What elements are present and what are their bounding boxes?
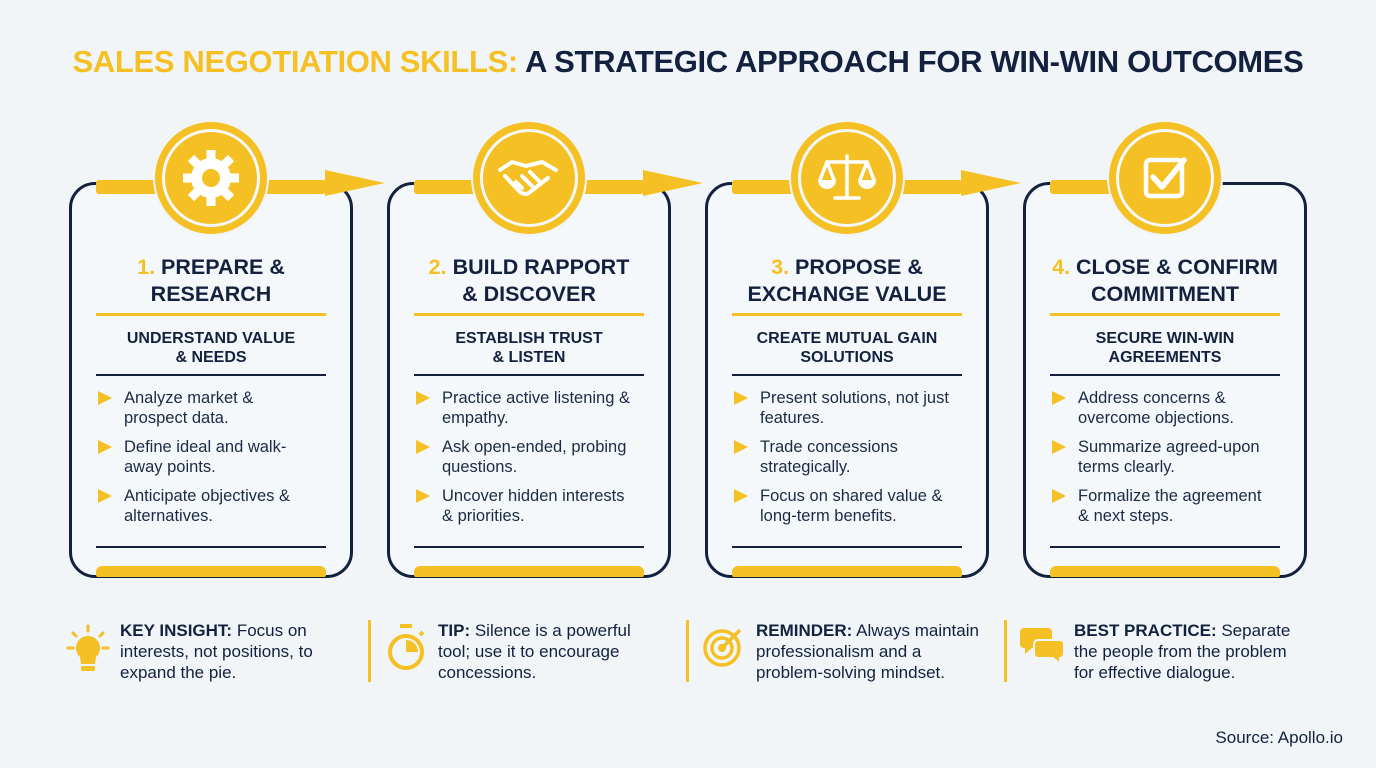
icon: checkbox bbox=[1107, 120, 1223, 236]
bullets 4: terms clearly. bbox=[1078, 458, 1175, 476]
bullets 1: Analyze market & bbox=[124, 389, 253, 407]
tip 4: best practice: for effective dialogue. bbox=[1074, 663, 1235, 682]
subheading 3 bbox=[757, 330, 937, 366]
heading 4 bbox=[1052, 255, 1278, 306]
source: Source: Apollo.io bbox=[1215, 728, 1343, 747]
bullets 2: Practice active listening & bbox=[442, 389, 630, 407]
subheading 2 bbox=[455, 330, 603, 366]
heading 2 bbox=[429, 255, 630, 306]
bullets 1: alternatives. bbox=[124, 507, 213, 525]
arrows bbox=[96, 170, 1150, 196]
tip 2: tip: concessions. bbox=[438, 663, 536, 682]
subheading 4 bbox=[1096, 330, 1234, 366]
bullets 3: long-term benefits. bbox=[760, 507, 897, 525]
card 4 bbox=[1023, 182, 1307, 578]
bullets 1: Define ideal and walk- bbox=[124, 438, 286, 456]
heading 1 bbox=[137, 255, 285, 306]
subheading 2: & LISTEN bbox=[493, 349, 565, 366]
heading 2: & DISCOVER bbox=[462, 282, 596, 306]
icon: lightbulb bbox=[66, 624, 110, 671]
tip 4: best practice: the people from the problem bbox=[1074, 642, 1287, 661]
tip 3: reminder: problem-solving mindset. bbox=[756, 663, 945, 682]
subheading 1: & NEEDS bbox=[175, 349, 247, 366]
icon: speech bubbles bbox=[1020, 628, 1063, 662]
subheading 3: CREATE MUTUAL GAIN bbox=[757, 330, 937, 347]
bullets 4: & next steps. bbox=[1078, 507, 1173, 525]
title: SALES NEGOTIATION SKILLS: A STRATEGIC APPROACH FOR WIN-WIN OUTCOMES bbox=[73, 44, 1303, 79]
bullets 2: questions. bbox=[442, 458, 517, 476]
bullets 3: Focus on shared value & bbox=[760, 487, 943, 505]
tip 1: key insight bbox=[66, 621, 313, 682]
bullets 2: Uncover hidden interests bbox=[442, 487, 625, 505]
bullets 3 bbox=[734, 389, 949, 525]
bullets 2 bbox=[416, 389, 630, 525]
bullets 3: features. bbox=[760, 409, 824, 427]
heading 2: 2. BUILD RAPPORT bbox=[429, 255, 629, 279]
bullets 1: Anticipate objectives & bbox=[124, 487, 290, 505]
heading 4: COMMITMENT bbox=[1091, 282, 1239, 306]
card 3 bbox=[705, 182, 989, 578]
tip 3: reminder bbox=[703, 621, 979, 682]
bullets 4: overcome objections. bbox=[1078, 409, 1234, 427]
tip 3: reminder: professionalism and a bbox=[756, 642, 921, 661]
icon: gear bbox=[153, 120, 269, 236]
subheading 4: SECURE WIN-WIN bbox=[1096, 330, 1234, 347]
card 2 bbox=[387, 182, 671, 578]
bullets 1: away points. bbox=[124, 458, 216, 476]
subheading 2: ESTABLISH TRUST bbox=[455, 330, 603, 347]
tip 4: best practice: BEST PRACTICE: Separate bbox=[1074, 621, 1290, 640]
bullets 3: Present solutions, not just bbox=[760, 389, 949, 407]
icon: scales bbox=[789, 120, 905, 236]
bullets 4: Formalize the agreement bbox=[1078, 487, 1261, 505]
bullets 2: & priorities. bbox=[442, 507, 525, 525]
tip 3: reminder: REMINDER: Always maintain bbox=[756, 621, 979, 640]
subheading 1 bbox=[127, 330, 295, 366]
tip 1: key insight: expand the pie. bbox=[120, 663, 236, 682]
bullets 1: prospect data. bbox=[124, 409, 229, 427]
tip 4: best practice bbox=[1020, 621, 1290, 682]
bullets 4 bbox=[1052, 389, 1262, 525]
icon: handshake bbox=[471, 120, 587, 236]
subheading 1: UNDERSTAND VALUE bbox=[127, 330, 295, 347]
bullets 2: empathy. bbox=[442, 409, 509, 427]
heading 3 bbox=[747, 255, 947, 306]
subheading 3: SOLUTIONS bbox=[800, 349, 894, 366]
heading 1: 1. PREPARE & bbox=[137, 255, 285, 279]
bullets 2: Ask open-ended, probing bbox=[442, 438, 626, 456]
tip 2: tip bbox=[388, 621, 631, 682]
heading 4: 4. CLOSE & CONFIRM bbox=[1052, 255, 1278, 279]
icon: target bbox=[703, 628, 742, 667]
step icons and arrows bbox=[96, 122, 1223, 234]
bullets 4: Address concerns & bbox=[1078, 389, 1226, 407]
heading 3: 3. PROPOSE & bbox=[771, 255, 923, 279]
tip 1: key insight: KEY INSIGHT: Focus on bbox=[120, 621, 307, 640]
icon: stopwatch bbox=[388, 624, 424, 670]
tip 1: key insight: interests, not positions, to bbox=[120, 642, 313, 661]
bullets 3: Trade concessions bbox=[760, 438, 898, 456]
subheading 4: AGREEMENTS bbox=[1109, 349, 1221, 366]
bullets 3: strategically. bbox=[760, 458, 850, 476]
card 1 bbox=[69, 182, 353, 578]
heading 3: EXCHANGE VALUE bbox=[747, 282, 947, 306]
bullets 4: Summarize agreed-upon bbox=[1078, 438, 1260, 456]
tip 2: tip: TIP: Silence is a powerful bbox=[438, 621, 631, 640]
bullets 1 bbox=[98, 389, 290, 525]
tip 2: tip: tool; use it to encourage bbox=[438, 642, 619, 661]
heading 1: RESEARCH bbox=[151, 282, 271, 306]
